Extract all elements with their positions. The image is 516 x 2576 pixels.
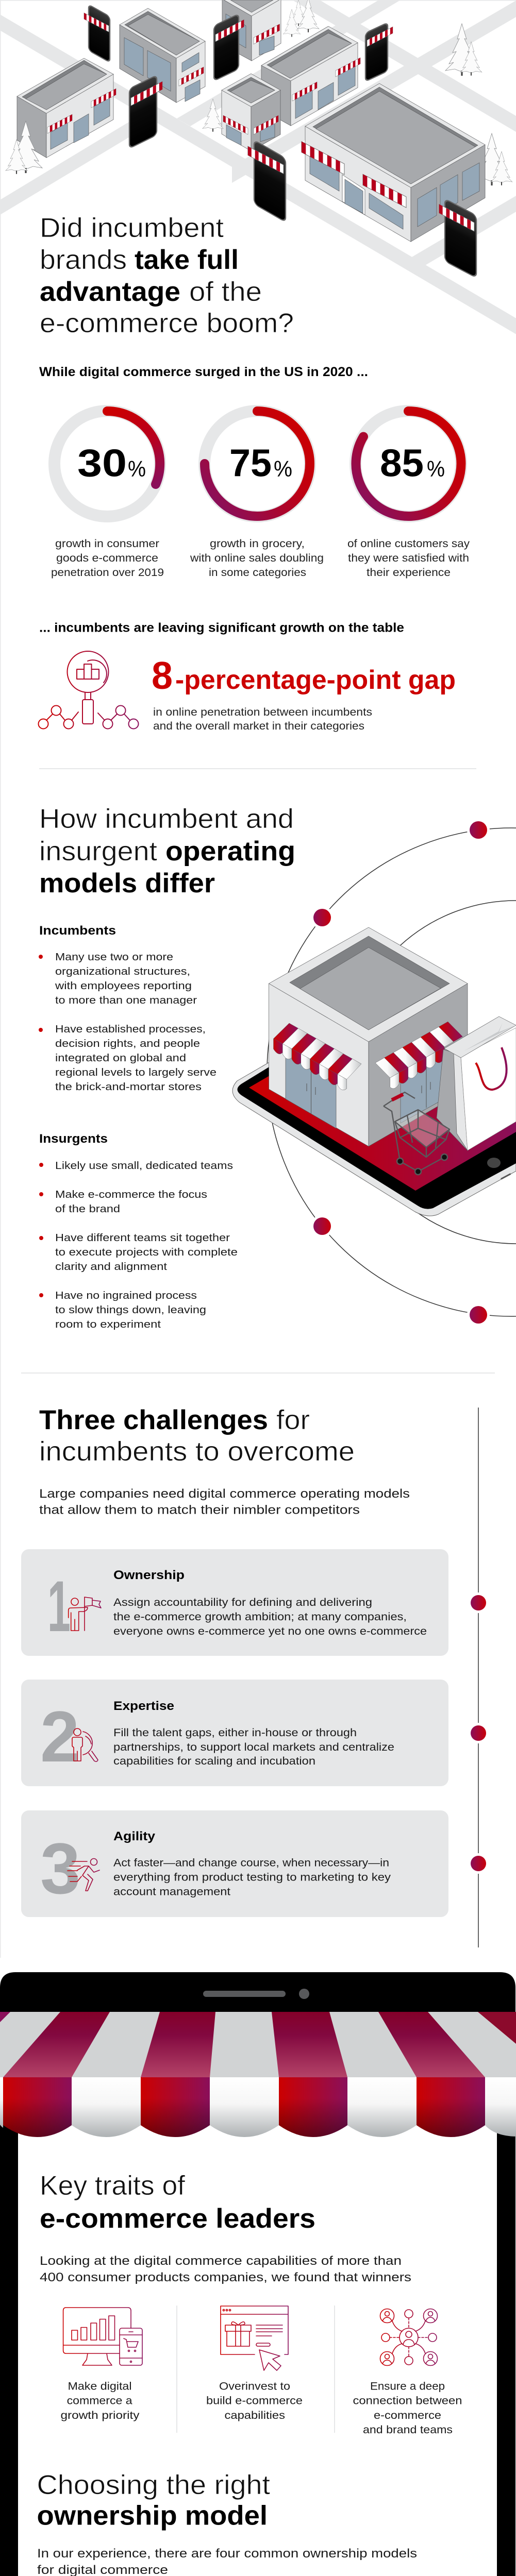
list: insurgents: Have different teams sit together <box>55 1232 230 1244</box>
stat: 75% <box>190 411 324 579</box>
list: incumbents <box>39 924 217 1093</box>
card: expertise: partnerships, to support local markets and centralize <box>113 1741 394 1753</box>
trait: growth priority: Make digital <box>68 2381 132 2393</box>
store 2 <box>120 8 205 103</box>
icon: person with flag <box>69 1597 101 1631</box>
card: ownership: Ownership <box>113 1568 185 1582</box>
tablet frame <box>0 1972 515 2576</box>
trait: growth priority: growth priority <box>61 2410 140 2421</box>
phone storefronts <box>84 5 476 278</box>
intro text: ownership models: In our experience, there are four common ownership models <box>37 2547 417 2561</box>
subheading: digital commerce surge: While digital commerce surged in the US in 2020 ... <box>39 365 368 379</box>
tablet screen <box>18 2061 497 2576</box>
icon: monitor and phone with bars <box>63 2308 142 2365</box>
card: ownership: the e-commerce growth ambition; at many companies, <box>113 1611 407 1623</box>
card: ownership: Assign accountability for defining and delivering <box>113 1597 372 1608</box>
store 1 <box>17 58 116 158</box>
stat: 30% <box>51 411 164 579</box>
shopping bag <box>437 1016 516 1150</box>
heading: operating models differ <box>39 804 295 899</box>
tablet <box>232 1005 516 1216</box>
callout: 8-percentage-point gap: in online penetration between incumbents <box>153 706 372 718</box>
intro text: key traits: 400 consumer products companies, we found that winners <box>40 2270 411 2284</box>
illustration: store on a tablet with cart and shopping bag <box>232 927 516 1216</box>
list: incumbents: Many use two or more <box>55 951 173 963</box>
card: agility <box>21 1810 448 1917</box>
card: expertise <box>21 1680 448 1786</box>
heading: ownership model: ownership model <box>37 2501 268 2531</box>
list: insurgents: room to experiment <box>55 1318 161 1330</box>
card: ownership: 1 <box>47 1566 71 1647</box>
stat: 75%: 75 <box>229 441 272 484</box>
list: insurgents: to execute projects with complete <box>55 1246 238 1258</box>
list: incumbents: organizational structures, <box>55 965 190 977</box>
list: incumbents: the brick-and-mortar stores <box>55 1081 202 1093</box>
page edge <box>0 0 516 1958</box>
title: take full <box>135 245 239 275</box>
store <box>269 927 468 1146</box>
heading: key traits <box>40 2171 315 2234</box>
heading: three challenges: Three challenges <box>39 1405 268 1435</box>
heading: key traits: Key traits of <box>40 2171 185 2201</box>
stat: 85% <box>347 411 470 579</box>
callout: 8-percentage-point gap: and the overall market in their categories <box>153 720 364 732</box>
trait: overinvest: Overinvest to <box>219 2381 290 2393</box>
camera <box>299 1989 309 1999</box>
stat: 30%: goods e-commerce <box>56 552 158 564</box>
stat: 75%: growth in grocery, <box>210 538 305 550</box>
stat: 30%: 30 <box>77 441 127 484</box>
intro text: key traits <box>40 2254 411 2284</box>
card: agility: account management <box>113 1886 230 1898</box>
trait: overinvest: build e-commerce <box>206 2395 303 2407</box>
list: insurgents: of the brand <box>55 1203 120 1215</box>
speaker <box>203 1991 286 1997</box>
trait: deep connection: e-commerce <box>374 2410 441 2421</box>
intro text: key traits: Looking at the digital commerce capabilities of more than <box>40 2254 402 2268</box>
stat: 85%: their experience <box>367 567 451 579</box>
trait: deep connection: and brand teams <box>363 2424 453 2436</box>
intro text: ownership models <box>37 2547 417 2576</box>
trees behind stores <box>283 0 512 185</box>
intro text: three challenges: that allow them to match their nimbler competitors <box>39 1503 360 1517</box>
card: expertise: 2 <box>40 1696 79 1777</box>
store 5 <box>222 74 280 151</box>
store 3 <box>222 0 281 61</box>
stat: 30%: growth in consumer <box>55 538 159 550</box>
stat: 85%: of online customers say <box>347 538 470 550</box>
stat: 30%: penetration over 2019 <box>51 567 164 579</box>
title: Did incumbent <box>40 213 224 243</box>
list: insurgents <box>39 1132 238 1330</box>
stat: 30%: % <box>128 456 146 481</box>
list: insurgents: to slow things down, leaving <box>55 1304 206 1316</box>
store 4 <box>261 26 360 126</box>
list: incumbents: with employees reporting <box>55 980 192 992</box>
list: insurgents: Likely use small, dedicated teams <box>55 1160 233 1172</box>
list: incumbents: decision rights, and people <box>55 1038 200 1049</box>
card: expertise: Fill the talent gaps, either in-house or through <box>113 1727 357 1739</box>
icon: browser window with gift and cursor <box>221 2306 288 2370</box>
stat: 75%: with online sales doubling <box>190 552 324 564</box>
card: expertise: capabilities for scaling and incubation <box>113 1755 315 1767</box>
title: e-commerce boom? <box>40 308 294 338</box>
card: agility: Agility <box>113 1829 156 1843</box>
card: ownership: everyone owns e-commerce yet no one owns e-commerce <box>113 1625 427 1637</box>
heading: three challenges: for <box>276 1405 310 1435</box>
left awning <box>273 1023 361 1090</box>
hero illustration: isometric town of stores and phones <box>0 0 516 334</box>
list: insurgents: Insurgents <box>39 1132 108 1146</box>
icon: running person <box>68 1859 99 1891</box>
right awning <box>375 1022 462 1089</box>
trait: growth priority <box>61 2308 142 2421</box>
title <box>40 213 294 338</box>
callout: 8-percentage-point gap: -percentage-point gap <box>175 665 456 695</box>
icon: people network <box>380 2309 437 2366</box>
list: insurgents: clarity and alignment <box>55 1261 167 1273</box>
icon: magnifier over data nodes <box>38 651 138 728</box>
stat: 85%: they were satisfied with <box>348 552 469 564</box>
card: agility: 3 <box>40 1828 80 1909</box>
heading: operating models differ: models differ <box>39 868 215 899</box>
icon: person with magnifier <box>72 1728 98 1761</box>
heading: operating models differ: How incumbent and <box>39 804 294 834</box>
card: agility: everything from product testing to marketing to key <box>113 1871 391 1884</box>
card: agility: Act faster—and change course, when necessary—in <box>113 1857 389 1869</box>
trait: growth priority: commerce a <box>67 2395 132 2407</box>
large store <box>302 83 485 242</box>
stat: 85%: 85 <box>380 441 424 484</box>
card: expertise: Expertise <box>113 1699 174 1713</box>
list: incumbents: Incumbents <box>39 924 116 938</box>
callout: 8-percentage-point gap: 8 <box>152 654 173 697</box>
trees in front of stores <box>6 99 223 174</box>
title: advantage <box>40 277 180 307</box>
list: incumbents: integrated on global and <box>55 1052 186 1064</box>
timeline line with dots <box>468 1408 489 1947</box>
orbit lines and dots <box>267 819 516 1326</box>
trait: deep connection <box>353 2309 462 2436</box>
title: brands <box>40 245 127 275</box>
list: incumbents: to more than one manager <box>55 994 197 1006</box>
heading: key traits: e-commerce leaders <box>40 2204 315 2234</box>
callout: 8-percentage-point gap <box>152 654 456 732</box>
trait: deep connection: Ensure a deep <box>370 2381 445 2393</box>
heading: operating models differ: operating <box>165 836 295 867</box>
list: insurgents: Make e-commerce the focus <box>55 1189 207 1200</box>
heading: operating models differ: insurgent <box>39 836 157 867</box>
intro text: three challenges: Large companies need digital commerce operating models <box>39 1487 410 1501</box>
heading: three challenges: incumbents to overcome <box>39 1436 355 1467</box>
street grid <box>0 0 516 334</box>
card: ownership <box>21 1549 448 1656</box>
trait: deep connection: connection between <box>353 2395 462 2407</box>
stat: 85%: % <box>427 456 445 481</box>
trait: overinvest <box>206 2306 303 2421</box>
list: insurgents: Have no ingrained process <box>55 1290 197 1301</box>
storefront awning <box>0 2012 516 2137</box>
title: of the <box>189 277 262 307</box>
list: incumbents: Have established processes, <box>55 1023 206 1035</box>
heading: three challenges <box>39 1405 355 1467</box>
shopping cart <box>384 1092 450 1175</box>
subheading: growth left on the table: ... incumbents are leaving significant growth on the table <box>39 620 404 635</box>
trait: overinvest: capabilities <box>225 2410 285 2421</box>
list: incumbents: regional levels to largely serve <box>55 1066 217 1078</box>
heading: ownership model: Choosing the right <box>37 2470 270 2500</box>
stat: 75%: % <box>274 456 292 481</box>
intro text: three challenges <box>39 1487 410 1517</box>
stat: 75%: in some categories <box>209 567 306 579</box>
heading: ownership model <box>37 2470 270 2531</box>
